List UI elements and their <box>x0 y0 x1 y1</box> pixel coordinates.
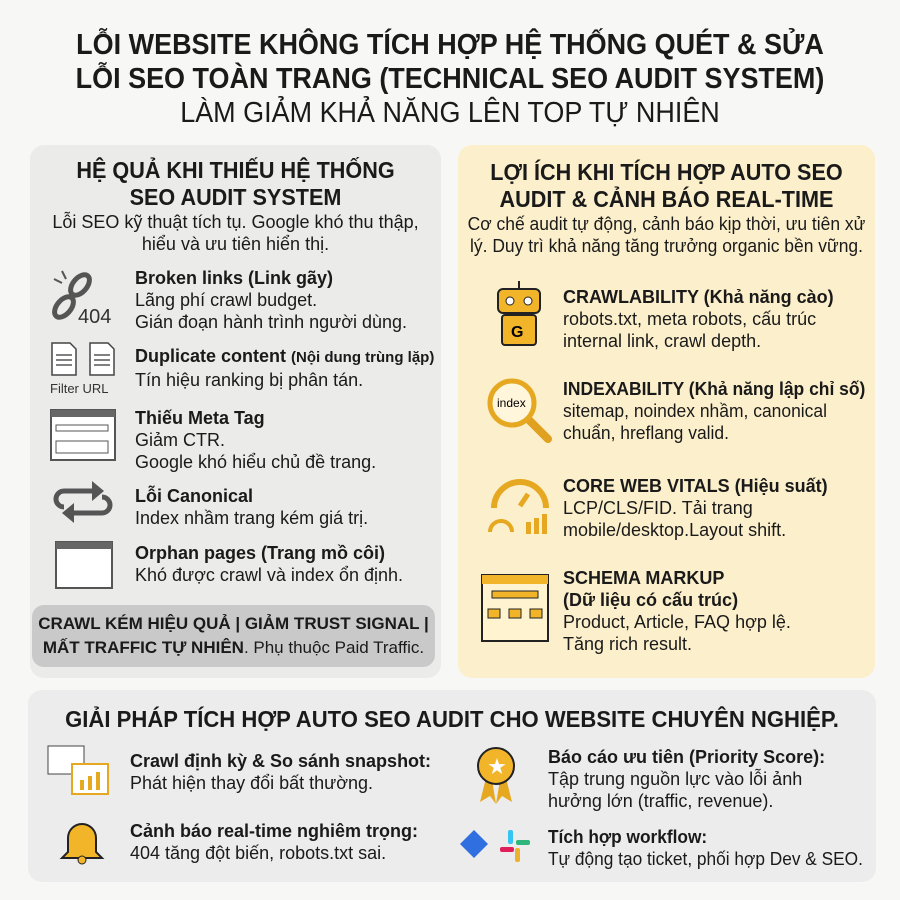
item: broken links: Lãng phí crawl budget. <box>135 290 317 310</box>
item: duplicate content <box>135 346 434 390</box>
heading: benefits <box>490 159 843 212</box>
icon: speedometer <box>488 479 549 534</box>
item: schema markup: (Dữ liệu có cấu trúc) <box>563 590 738 610</box>
item: orphan pages: Khó được crawl và index ổn định. <box>135 565 403 585</box>
item: indexability <box>563 379 865 443</box>
heading: consequences: HỆ QUẢ KHI THIẾU HỆ THỐNG <box>76 157 395 183</box>
item: crawlability <box>563 287 834 351</box>
icon: duplicate docs: Filter URL <box>50 381 109 396</box>
callout: summary <box>32 605 435 667</box>
item: core web vitals <box>563 476 828 540</box>
item: real-time alert <box>130 821 418 863</box>
item: broken links: Broken links (Link gãy) <box>135 268 333 288</box>
item: meta tag: Google khó hiểu chủ đề trang. <box>135 452 376 472</box>
item: meta tag: Giảm CTR. <box>135 430 225 450</box>
item: schema markup <box>563 568 791 654</box>
item: duplicate content: Tín hiệu ranking bị phân tán. <box>135 370 363 390</box>
item: indexability: chuẩn, hreflang valid. <box>563 423 729 443</box>
item: priority score: Báo cáo ưu tiên (Priority Score): <box>548 747 825 767</box>
icon: magnifier index <box>488 378 552 443</box>
heading: benefits: LỢI ÍCH KHI TÍCH HỢP AUTO SEO <box>490 159 843 185</box>
panel: consequences <box>30 145 441 678</box>
icon: robot: G <box>511 324 523 341</box>
icon: schema window <box>481 574 549 642</box>
heading: consequences: SEO AUDIT SYSTEM <box>130 184 341 210</box>
intro text: lý. Duy trì khả năng tăng trưởng organic bền vững. <box>470 236 863 256</box>
item: crawl snapshot: Crawl định kỳ & So sánh snapshot: <box>130 751 431 771</box>
icon: canonical arrows <box>54 481 112 523</box>
icon: workflow <box>460 830 530 862</box>
item: crawlability: internal link, crawl depth. <box>563 331 761 351</box>
item: schema markup: Product, Article, FAQ hợp lệ. <box>563 612 791 632</box>
title: LỖI SEO TOÀN TRANG (TECHNICAL SEO AUDIT SYSTEM) <box>76 63 824 95</box>
title: LỖI WEBSITE KHÔNG TÍCH HỢP HỆ THỐNG QUÉT & SỬA <box>76 29 824 61</box>
item: schema markup: Tăng rich result. <box>563 634 692 654</box>
item: workflow: Tích hợp workflow: <box>548 827 707 847</box>
callout: summary: CRAWL KÉM HIỆU QUẢ | GIẢM TRUST SIGNAL | <box>38 614 429 633</box>
item: orphan pages <box>135 543 403 585</box>
item: canonical: Lỗi Canonical <box>135 486 253 506</box>
item: meta tag <box>135 408 376 472</box>
item: real-time alert: Cảnh báo real-time nghiêm trọng: <box>130 821 418 841</box>
heading: consequences <box>76 157 395 210</box>
intro text: Cơ chế audit tự động, cảnh báo kịp thời, ưu tiên xử <box>468 214 865 234</box>
item: priority score: hưởng lớn (traffic, revenue). <box>548 791 773 811</box>
item: schema markup: SCHEMA MARKUP <box>563 568 724 588</box>
title: LÀM GIẢM KHẢ NĂNG LÊN TOP TỰ NHIÊN <box>180 97 720 129</box>
item: meta tag: Thiếu Meta Tag <box>135 408 265 428</box>
icon: snapshot <box>48 746 109 795</box>
icon: award <box>477 747 515 804</box>
item: indexability: INDEXABILITY (Khả năng lập chỉ số) <box>563 379 865 399</box>
heading: benefits: AUDIT & CẢNH BÁO REAL-TIME <box>500 186 833 212</box>
item: duplicate content: Duplicate content (Nội dung trùng lặp) <box>135 346 434 366</box>
icon: duplicate docs <box>50 342 115 396</box>
item: core web vitals: CORE WEB VITALS (Hiệu suất) <box>563 476 828 496</box>
panel: benefits <box>458 145 875 678</box>
intro text <box>52 212 419 254</box>
item: indexability: sitemap, noindex nhầm, canonical <box>563 401 827 421</box>
icon: award: ★ <box>488 757 506 777</box>
item: priority score: Tập trung nguồn lực vào lỗi ảnh <box>548 769 802 789</box>
title <box>76 28 824 129</box>
callout: summary: MẤT TRAFFIC TỰ NHIÊN. Phụ thuộc Paid Traffic. <box>43 638 424 657</box>
item: broken links <box>135 268 407 332</box>
item: crawl snapshot: Phát hiện thay đổi bất thường. <box>130 773 373 793</box>
item: priority score <box>548 747 825 811</box>
heading: solutions: GIẢI PHÁP TÍCH HỢP AUTO SEO AUDIT CHO WEBSITE CHUYÊN NGHIỆP. <box>65 706 839 732</box>
item: workflow <box>548 827 863 869</box>
item: real-time alert: 404 tăng đột biến, robots.txt sai. <box>130 843 386 863</box>
item: crawlability: robots.txt, meta robots, cấu trúc <box>563 309 816 329</box>
item: core web vitals: LCP/CLS/FID. Tải trang <box>563 498 753 518</box>
icon: orphan window <box>55 541 113 589</box>
item: canonical: Index nhầm trang kém giá trị. <box>135 508 368 528</box>
item: broken links: Gián đoạn hành trình người dùng. <box>135 312 407 332</box>
item: workflow: Tự động tạo ticket, phối hợp Dev & SEO. <box>548 849 863 869</box>
intro text: hiểu và ưu tiên hiển thị. <box>142 234 329 254</box>
icon: bell <box>60 823 104 864</box>
item: orphan pages: Orphan pages (Trang mồ côi) <box>135 543 385 563</box>
icon: meta tag window <box>50 409 116 461</box>
icon: broken link <box>52 270 111 327</box>
item: crawl snapshot <box>130 751 431 793</box>
item: canonical <box>135 486 368 528</box>
panel: solutions <box>28 690 876 882</box>
intro text: Lỗi SEO kỹ thuật tích tụ. Google khó thu thập, <box>52 212 419 232</box>
icon: robot <box>497 281 541 346</box>
item: core web vitals: mobile/desktop.Layout shift. <box>563 520 786 540</box>
icon: magnifier index: index <box>497 396 526 410</box>
item: crawlability: CRAWLABILITY (Khả năng cào) <box>563 287 834 307</box>
intro text <box>468 214 865 256</box>
